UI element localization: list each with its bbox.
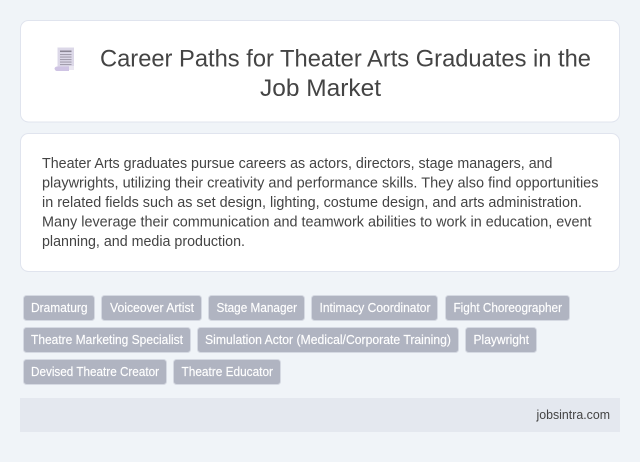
tag: Dramaturg: Dramaturg: [31, 301, 88, 315]
text block: description: Theater Arts graduates pursue careers as actors, directors, stage managers, and: [42, 156, 552, 172]
tag: Fight Choreographer: [446, 296, 570, 320]
tag: Voiceover Artist: [102, 296, 202, 320]
tag: Dramaturg: [24, 296, 94, 320]
text block: description: Many leverage their communication and teamwork abilities to work in education, event: [42, 214, 592, 230]
panel: header card: [20, 20, 620, 122]
tag: Intimacy Coordinator: Intimacy Coordinator: [320, 301, 430, 315]
tag: Voiceover Artist: Voiceover Artist: [110, 301, 195, 315]
text block: description: in related fields such as set design, lighting, costume design, and arts administration.: [42, 195, 582, 211]
tag: Playwright: [466, 328, 536, 352]
icon: script scroll: [54, 48, 74, 71]
title: Job Market: [260, 75, 381, 102]
tag: Theatre Educator: [174, 360, 280, 384]
tag: Devised Theatre Creator: Devised Theatre Creator: [31, 365, 159, 379]
tag: Playwright: Playwright: [474, 333, 529, 347]
tag: Theatre Educator: Theatre Educator: [182, 365, 273, 379]
tag: Simulation Actor: [198, 328, 458, 352]
footer bar: [20, 398, 620, 432]
title: Career Paths for Theater Arts Graduates in the: [100, 46, 591, 72]
tag: Devised Theatre Creator: [24, 360, 166, 384]
panel: career tags: [24, 296, 570, 384]
tag: Intimacy Coordinator: [312, 296, 438, 320]
tag: Simulation Actor: Simulation Actor (Medical/Corporate Training): [205, 333, 451, 347]
tag: Fight Choreographer: Fight Choreographer: [454, 301, 562, 315]
panel: description card: [20, 134, 620, 272]
tag: Theatre Marketing Specialist: Theatre Marketing Specialist: [31, 333, 184, 347]
text block: description: playwrights, utilizing their creativity and performance skills. They also find opportunities: [42, 176, 598, 192]
tag: Theatre Marketing Specialist: [24, 328, 190, 352]
tag: Stage Manager: Stage Manager: [216, 301, 297, 315]
tag: Stage Manager: [208, 296, 304, 320]
text block: description: planning, and media production.: [42, 234, 245, 250]
footer source text: jobsintra.com: [536, 408, 610, 422]
title: [100, 46, 591, 102]
text block: description: [42, 156, 598, 250]
